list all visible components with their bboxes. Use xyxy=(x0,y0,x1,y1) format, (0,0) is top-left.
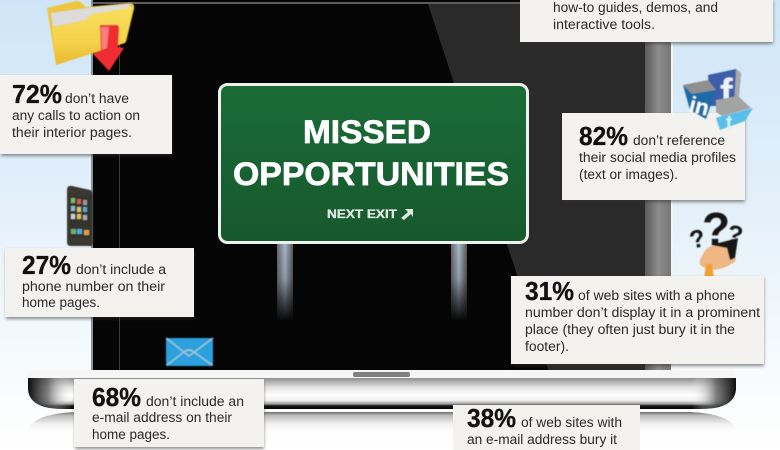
stat text: 38% xyxy=(467,403,516,433)
stat text xyxy=(579,121,736,182)
icon: envelope xyxy=(166,338,213,366)
stat text xyxy=(467,403,622,447)
base reflection xyxy=(28,412,736,436)
highway sign xyxy=(220,84,528,321)
stat text: 72% xyxy=(12,79,62,109)
face xyxy=(700,244,736,270)
icon: exit arrow xyxy=(401,209,413,220)
next exit label: NEXT EXIT xyxy=(327,209,397,221)
monitor xyxy=(91,0,673,372)
stat text xyxy=(92,382,244,442)
card: 38% e-mail buried xyxy=(453,403,640,450)
stat text: e-mail address on their xyxy=(92,410,232,425)
stat text: don’t have xyxy=(65,91,129,106)
stat text: 68% xyxy=(92,382,141,412)
stat text xyxy=(22,250,166,310)
stat text: phone number on their xyxy=(22,279,166,294)
stat text: of web sites with xyxy=(521,415,622,430)
sign posts xyxy=(276,244,468,321)
card: 27% phone number xyxy=(5,248,194,319)
stat text: place (they often just bury it in the xyxy=(525,322,735,337)
stat text: (text or images). xyxy=(579,167,678,182)
sign title: MISSED xyxy=(303,114,431,150)
question marks xyxy=(687,203,746,255)
stat text: home pages. xyxy=(92,427,170,442)
question marks: ? xyxy=(687,224,708,255)
stat text xyxy=(525,276,760,354)
stat text: their interior pages. xyxy=(12,125,132,140)
question marks: ? xyxy=(702,203,730,255)
stat text: home pages. xyxy=(22,295,100,310)
question marks: ? xyxy=(724,220,746,250)
linkedin cube: in xyxy=(687,92,712,121)
laptop base xyxy=(28,370,736,409)
stat text: don’t include an xyxy=(146,394,244,409)
sign board xyxy=(220,84,528,242)
stat text: footer). xyxy=(525,339,569,354)
card text xyxy=(553,0,718,32)
collar xyxy=(692,266,740,277)
stat text: an e-mail address bury it xyxy=(467,432,617,447)
icon: social media cubes xyxy=(683,69,753,134)
tie xyxy=(704,264,714,277)
card text: interactive tools. xyxy=(553,17,655,32)
arrow xyxy=(93,25,124,71)
icon: smartphone xyxy=(67,186,93,246)
stat text: 31% xyxy=(525,276,574,306)
card: 31% phone not prominent xyxy=(511,276,764,366)
twitter cube: t xyxy=(726,113,733,134)
card: 72% call to action xyxy=(0,75,173,156)
icon: folder with download arrow xyxy=(47,1,134,71)
facebook cube: f xyxy=(720,72,733,114)
hair xyxy=(711,238,738,260)
stat text: don’t include a xyxy=(76,262,166,277)
stat text: of web sites with a phone xyxy=(578,288,735,303)
stat text: 82% xyxy=(579,121,628,151)
card: 82% social media xyxy=(562,113,745,202)
stat text: number don’t display it in a prominent xyxy=(525,305,760,320)
stat text: 27% xyxy=(22,250,71,280)
stat text xyxy=(12,79,140,140)
sign title: OPPORTUNITIES xyxy=(233,156,509,192)
stat text: any calls to action on xyxy=(12,108,140,123)
sign title xyxy=(233,114,509,192)
card: how-to guides xyxy=(520,0,773,44)
stat text: don’t reference xyxy=(633,133,725,148)
icon: confused man with question marks xyxy=(687,203,746,277)
card text: how-to guides, demos, and xyxy=(553,0,718,15)
stat text: their social media profiles xyxy=(579,150,736,165)
card: 68% e-mail address xyxy=(74,379,264,449)
